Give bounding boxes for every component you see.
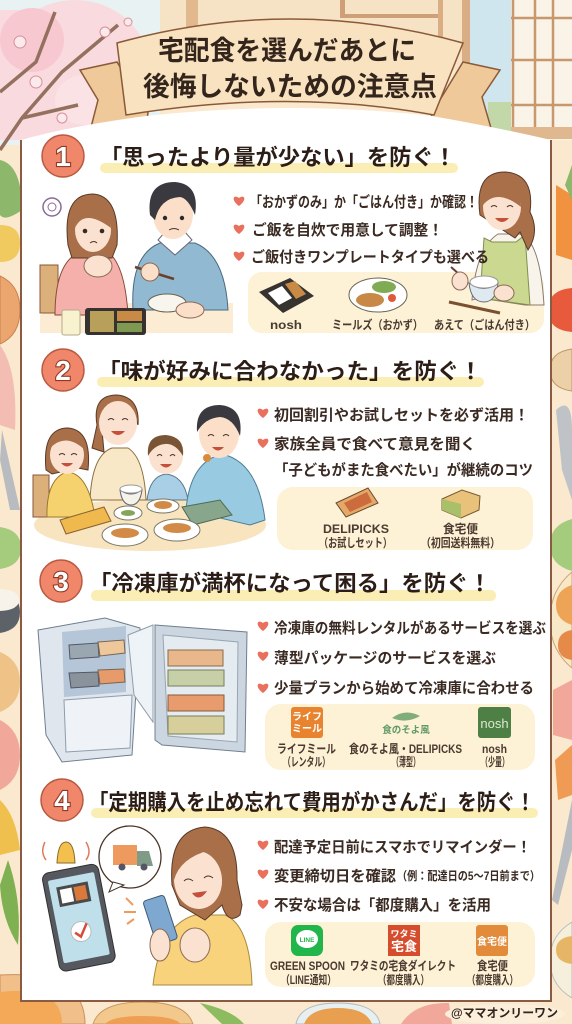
smartphone in hand [143, 895, 178, 945]
logo strip 2 [277, 487, 533, 550]
checklist 2: 初回割引やお試しセットを必ず活用！ [274, 406, 529, 424]
logo: watami: 宅食 [391, 939, 417, 954]
logo: LINE: LINE [300, 937, 315, 944]
logo strip 2: 食宅便 [443, 521, 478, 536]
logo strip 3: （少量） [481, 754, 509, 769]
sky behind blossoms [0, 0, 160, 150]
heading 3: 3 [53, 566, 69, 597]
title text: 宅配食を選んだあとに [158, 36, 416, 66]
logo strip 1: nosh [270, 318, 302, 332]
heading 2: 「味が好みに合わなかった」を防ぐ！ [98, 359, 482, 384]
checklist 1: 「おかずのみ」か「ごはん付き」か確認！ [250, 193, 478, 211]
bottom food decorations [93, 1002, 565, 1024]
logo: watami: ワタミ [390, 928, 418, 939]
checklist 4: 配達予定日前にスマホでリマインダー！ [274, 838, 531, 856]
food: nosh tray [259, 278, 314, 313]
logo: nosh: nosh [480, 716, 509, 731]
heading 2: 2 [55, 355, 71, 386]
logo: shokutakubin [476, 925, 508, 956]
checklist 3: 冷凍庫の無料レンタルがあるサービスを選ぶ [274, 619, 546, 637]
logo: shokunosoyokaze: 食のそよ風 [382, 724, 430, 736]
heading 1: 「思ったより量が少ない」を防ぐ！ [100, 145, 456, 170]
illustration: cheerful woman with rice [449, 172, 544, 313]
right side food decorations [548, 165, 572, 998]
logo strip 4: GREEN SPOON [270, 959, 345, 973]
title ribbon [80, 19, 500, 135]
logo strip 4: （都度購入） [378, 972, 429, 987]
logo: LINE [291, 925, 323, 956]
heading 3 [40, 560, 496, 602]
icon: bell [43, 842, 89, 863]
credit: @ママオンリーワン [451, 1006, 558, 1020]
logo: life meal: ライフ [292, 711, 322, 723]
heading 1: 1 [55, 141, 71, 172]
checklist 2: 「子どもがまた食べたい」が継続のコツ [274, 461, 533, 479]
logo: nosh [478, 707, 511, 738]
logo strip 1 [248, 272, 544, 333]
checklist 1: ご飯を自炊で用意して調整！ [252, 221, 443, 239]
checklist 4 [258, 838, 540, 914]
logo strip 3: ライフミール [277, 742, 336, 756]
illustration: happy family at table [33, 395, 266, 551]
icon: worry swirl [43, 198, 61, 216]
logo strip 4: （LINE通知） [281, 972, 336, 987]
logo strip 4: 食宅便 [477, 958, 508, 973]
logo: shokunosoyokaze [382, 712, 430, 736]
checklist 2 [258, 406, 533, 479]
rays [124, 898, 136, 924]
title text: 後悔しないための注意点 [143, 72, 437, 102]
logo strip 3: nosh [482, 742, 507, 756]
food: trial set box [336, 488, 378, 517]
checklist 3 [258, 619, 546, 697]
window with blue sky [462, 0, 511, 140]
logo strip 3: （薄型） [392, 754, 420, 769]
illustration: worried couple [40, 182, 233, 335]
logo strip 1: あえて（ごはん付き） [434, 317, 535, 332]
logo: life meal [291, 707, 323, 738]
logo strip 3: 食のそよ風・DELIPICKS [349, 741, 462, 756]
logo strip 4: ワタミの宅食ダイレクト [350, 958, 456, 973]
logo strip 3: （レンタル） [283, 755, 330, 769]
checklist 3: 薄型パッケージのサービスを選ぶ [274, 649, 496, 667]
section 2 [33, 349, 533, 551]
illustration: woman with smartphone reminder [41, 826, 252, 985]
logo strip 3 [265, 704, 535, 770]
logo strip 2: DELIPICKS [323, 522, 389, 536]
smartphone with check [41, 863, 116, 972]
checklist 4: 変更締切日を確認 [274, 867, 396, 885]
checklist 4: （例：配達日の5〜7日前まで） [397, 868, 540, 883]
shoji window frame [511, 0, 572, 140]
heading 3: 「冷凍庫が満杯になって困る」を防ぐ！ [89, 571, 491, 596]
food: plate [349, 278, 407, 312]
speech bubble with truck [99, 826, 161, 892]
checklist 4: 不安な場合は「都度購入」を活用 [274, 896, 491, 914]
logo: life meal: ミール [292, 724, 322, 735]
checklist 1: ご飯付きワンプレートタイプも選べる [251, 248, 489, 266]
logo: watami [388, 925, 420, 956]
logo: shokutakubin: 食宅便 [477, 935, 507, 948]
heading 4 [41, 779, 538, 821]
left side food decorations [0, 160, 85, 1024]
icon: delivery box [442, 490, 480, 518]
checklist 2: 家族全員で食べて意見を聞く [274, 435, 476, 453]
checklist 3: 少量プランから始めて冷凍庫に合わせる [274, 680, 534, 697]
logo strip 4 [265, 922, 535, 987]
heading 2 [42, 349, 484, 391]
logo strip 1: ミールズ（おかず） [332, 317, 423, 332]
heading 1 [42, 135, 458, 177]
illustration: full freezer [38, 618, 247, 762]
title text [143, 36, 437, 102]
section 1 [40, 135, 544, 335]
section 4 [41, 779, 540, 987]
heading 4: 4 [54, 785, 70, 816]
section 3 [38, 560, 546, 770]
logo strip 2: （初回送料無料） [421, 535, 500, 550]
checklist 1 [234, 193, 489, 266]
logo strip 2: （お試しセット） [319, 536, 392, 550]
logo strip 4: （都度購入） [467, 972, 518, 987]
